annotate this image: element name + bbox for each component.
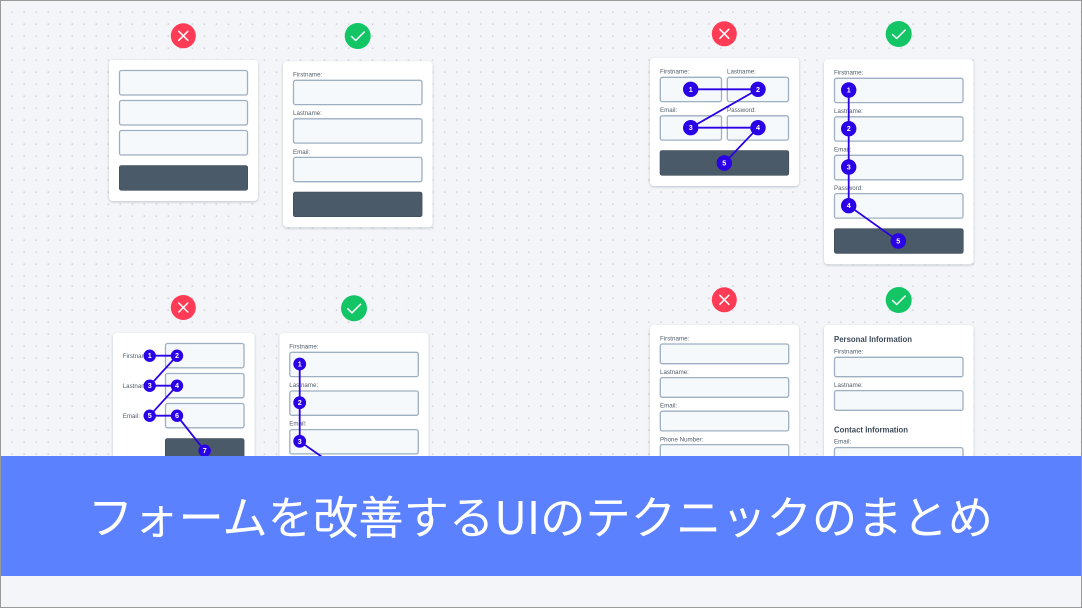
panel: ungrouped form <box>650 325 799 473</box>
panel: ungrouped form: Firstname: <box>660 335 690 342</box>
reading path: 1 <box>148 351 152 360</box>
reading path: 2 <box>756 85 760 94</box>
reading path <box>683 82 766 171</box>
reading path: 2 <box>847 124 851 133</box>
panel: two-column form: Password: <box>727 107 756 114</box>
panel: ungrouped form: Phone Number: <box>660 436 704 443</box>
panel: two-column form: Firstname: <box>660 68 690 76</box>
reading path: 3 <box>847 162 851 172</box>
reading path: 1 <box>847 86 851 94</box>
reading path <box>144 350 211 457</box>
heading: contact information: Contact Information <box>834 425 908 434</box>
reading path: 3 <box>148 381 152 390</box>
title banner <box>0 456 1082 576</box>
panel: side-label form: Email: <box>123 413 140 420</box>
panel: single-column form: Firstname: <box>834 70 864 76</box>
icon: right <box>886 21 912 47</box>
icon: right <box>341 295 367 321</box>
panel: two-column form <box>650 58 799 186</box>
example 4: right, grouped <box>824 287 974 473</box>
icon: wrong <box>712 287 737 312</box>
example 2: right, single-column path <box>824 21 974 264</box>
reading path: 6 <box>175 411 179 420</box>
panel: ungrouped form: Lastname: <box>660 369 689 376</box>
reading path: 2 <box>298 398 302 407</box>
icon: wrong <box>712 21 737 46</box>
reading path <box>841 82 906 249</box>
reading path: 1 <box>298 360 302 368</box>
panel: grouped form: Firstname: <box>834 348 864 355</box>
heading: personal information: Personal Information <box>834 335 912 344</box>
example 2: wrong, two-column path <box>650 21 799 186</box>
reading path: 7 <box>203 446 207 455</box>
panel: single-column form: Lastname: <box>834 108 863 115</box>
reading path: 5 <box>896 236 900 246</box>
panel: two-column form: Lastname: <box>727 68 756 76</box>
reading path: 4 <box>756 123 760 132</box>
panel: form with labels <box>283 61 432 227</box>
panel: single-column form <box>824 59 974 264</box>
example 3: right, top labels <box>280 295 428 473</box>
title: フォームを改善するUIのテクニックのまとめ <box>88 482 993 548</box>
panel: grouped form: Lastname: <box>834 382 863 389</box>
panel: two-column form: Email: <box>660 107 677 114</box>
icon: wrong <box>171 295 196 320</box>
panel: side-label form: Firstname: <box>123 353 152 360</box>
example 1: wrong, no labels <box>109 23 258 201</box>
reading path: 5 <box>722 158 726 168</box>
reading path: 2 <box>175 351 179 360</box>
panel: grouped form: Email: <box>834 439 851 446</box>
panel: form with labels: Email: <box>293 149 310 156</box>
panel: form with labels: Lastname: <box>293 110 322 117</box>
panel: side-label form: Lastname: <box>123 383 152 390</box>
panel: top-label form: Email: <box>289 421 307 428</box>
icon: wrong <box>171 23 196 48</box>
example 1: right, with labels <box>283 23 432 227</box>
panel: top-label form: Firstname: <box>289 344 319 350</box>
panel: form without labels <box>109 60 258 201</box>
panel: form with labels: Firstname: <box>293 72 323 79</box>
reading path: 3 <box>298 437 302 446</box>
reading path: 4 <box>175 381 179 390</box>
panel: ungrouped form: Email: <box>660 403 677 410</box>
reading path: 4 <box>847 201 851 210</box>
example 4: wrong, ungrouped <box>650 287 799 473</box>
panel: top-label form <box>280 333 428 473</box>
panel: single-column form: Password: <box>834 185 863 192</box>
reading path <box>293 358 325 459</box>
example 3: wrong, side labels <box>113 295 254 473</box>
panel: grouped form <box>824 325 974 473</box>
reading path: 5 <box>148 411 152 420</box>
icon: right <box>886 287 912 313</box>
panel: top-label form: Lastname: <box>289 382 318 389</box>
icon: right <box>345 23 371 49</box>
reading path: 3 <box>689 123 693 132</box>
panel: single-column form: Email: <box>834 147 851 154</box>
reading path: 1 <box>689 85 693 94</box>
panel: side-label form <box>113 333 254 473</box>
